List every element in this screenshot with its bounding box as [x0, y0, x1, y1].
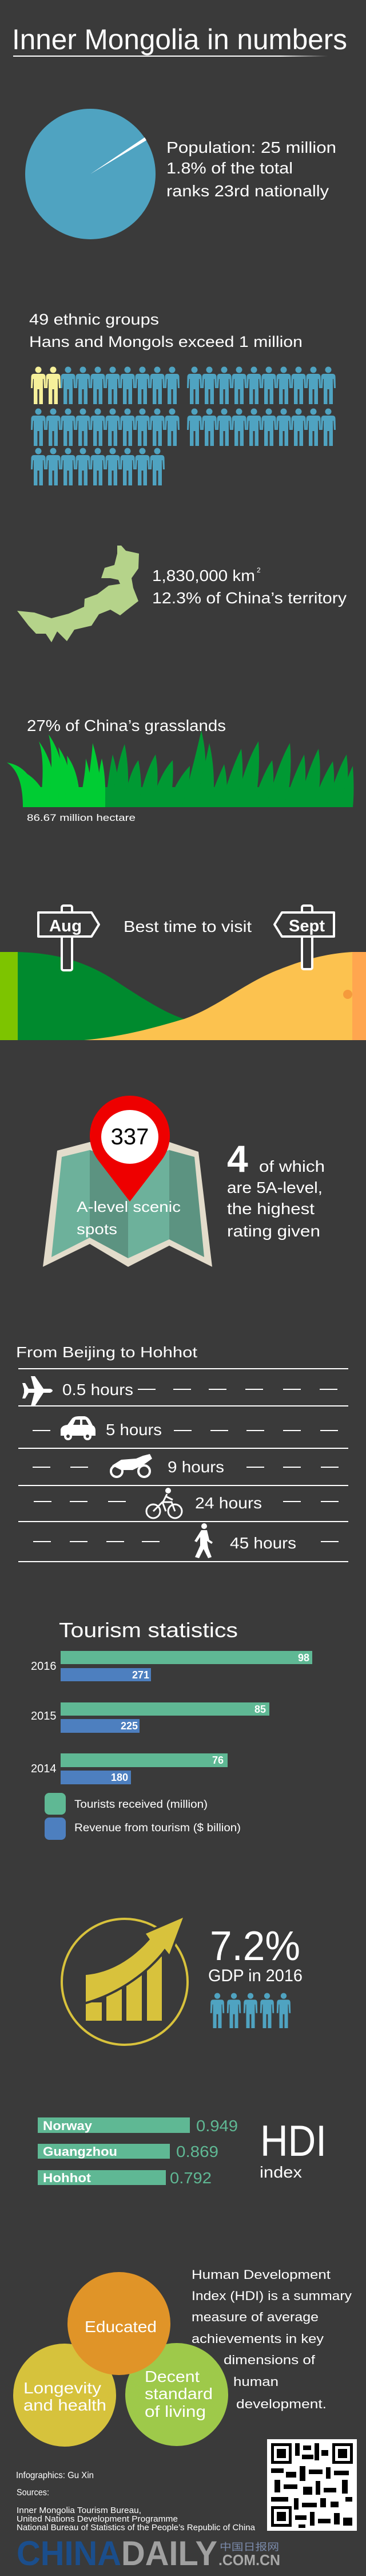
tourism bar chart: 2015 [31, 1710, 56, 1722]
GDP text: GDP in 2016 [208, 1966, 303, 1985]
area text: 1,830,000 km [152, 567, 255, 584]
title: Inner Mongolia in numbers [12, 23, 347, 56]
HDI definition text: human [233, 2374, 279, 2389]
credits and sources: Infographics: Gu Xin [16, 2471, 94, 2480]
credits and sources: National Bureau of Statistics of the People’s Republic of China [17, 2523, 256, 2532]
5A-level text: 4 [227, 1137, 248, 1180]
people icons: 49 ethnic groups [31, 366, 336, 485]
ethnic groups text: Hans and Mongols exceed 1 million [29, 333, 303, 350]
grasslands heading: 27% of China’s grasslands [27, 717, 226, 734]
HDI heading: HDI [260, 2117, 327, 2166]
credits and sources: Inner Mongolia Tourism Bureau, [17, 2506, 141, 2515]
folded map icon with pin: 337 [111, 1124, 149, 1149]
map of Inner Mongolia [17, 546, 139, 642]
legend [45, 1793, 241, 1840]
sign: Aug: Aug [49, 917, 82, 935]
HDI bar chart: Norway [43, 2119, 93, 2133]
tourism bar chart: 225 [121, 1720, 138, 1732]
credits and sources [16, 2471, 256, 2532]
HDI dimensions venn: Decent [145, 2368, 200, 2385]
folded map icon with pin: A-level scenic [77, 1198, 181, 1215]
population text: ranks 23rd nationally [166, 182, 329, 200]
sign: Sept [274, 906, 334, 969]
5A-level text: rating given [227, 1222, 320, 1240]
transport heading: From Beijing to Hohhot [16, 1344, 198, 1361]
HDI dimensions venn: Longevity [23, 2379, 101, 2397]
HDI heading [260, 2117, 327, 2181]
GDP text: 7.2% [210, 1923, 300, 1969]
HDI dimensions venn: standard [145, 2385, 213, 2403]
sign: Sept: Sept [289, 917, 325, 935]
transport road chart: 45 hours [230, 1534, 296, 1552]
grass illustration [7, 730, 353, 807]
folded map icon with pin: spots [77, 1220, 117, 1238]
HDI definition text: Index (HDI) is a summary [192, 2289, 352, 2303]
legend: Revenue from tourism ($ billion) [74, 1822, 241, 1834]
HDI dimensions venn: Educated [85, 2318, 157, 2336]
population text [166, 139, 336, 200]
HDI definition text: development. [236, 2397, 327, 2411]
people icons: GDP [210, 1993, 291, 2028]
HDI definition text: achievements in key [192, 2332, 324, 2346]
HDI bar chart: Hohhot [43, 2171, 92, 2185]
5A-level text: the highest [227, 1200, 315, 1218]
sign: Aug [38, 906, 99, 970]
transport road chart [18, 1368, 348, 1562]
ethnic groups text: 49 ethnic groups [29, 311, 159, 328]
logo: China Daily: .COM.CN [218, 2551, 280, 2569]
HDI dimensions venn: of living [145, 2403, 206, 2420]
tourism bar chart: 98 [298, 1652, 309, 1664]
HDI bar chart: 0.869 [176, 2143, 218, 2160]
hills: seasons [0, 952, 366, 1040]
tourism bar chart: 2016 [31, 1660, 56, 1673]
QR code [267, 2439, 357, 2531]
icon: car [61, 1416, 96, 1440]
area text [152, 566, 347, 607]
HDI definition text [192, 2267, 352, 2411]
tourism bar chart: 271 [132, 1669, 149, 1681]
area text: 2 [257, 566, 261, 574]
tourism bar chart: 2014 [31, 1763, 56, 1775]
icon: GDP growth chart [62, 1918, 188, 2045]
HDI bar chart: Guangzhou [43, 2144, 117, 2159]
logo: China Daily: CHINA [17, 2534, 121, 2573]
HDI definition text: measure of average [192, 2310, 319, 2324]
HDI heading: index [260, 2163, 302, 2181]
5A-level text: are 5A-level, [227, 1179, 323, 1196]
transport road chart: 24 hours [195, 1494, 262, 1512]
HDI dimensions venn [13, 2272, 228, 2447]
folded map icon with pin [43, 1096, 212, 1267]
logo: China Daily: DAILY [121, 2534, 217, 2573]
ethnic groups text [29, 311, 303, 350]
5A-level text: of which [259, 1157, 325, 1175]
icon: motorbike [111, 1454, 152, 1477]
population text: Population: 25 million [166, 139, 336, 156]
icon: plane [22, 1376, 53, 1406]
credits and sources: Sources: [17, 2488, 49, 2498]
transport road chart: 5 hours [106, 1421, 162, 1439]
best time text: Best time to visit [124, 918, 252, 935]
icon: walker [194, 1523, 213, 1558]
tourism bar chart: 180 [111, 1772, 128, 1783]
HDI bar chart: 0.792 [170, 2169, 212, 2187]
population text: 1.8% of the total [166, 159, 293, 177]
HDI definition text: dimensions of [224, 2353, 316, 2367]
hectare caption: 86.67 million hectare [27, 812, 136, 823]
pie chart: population [25, 109, 156, 239]
tourism bar chart [31, 1651, 312, 1784]
5A-level text [227, 1137, 325, 1240]
tourism bar chart: 85 [254, 1704, 266, 1715]
HDI dimensions venn: and health [23, 2396, 106, 2414]
icon: bicycle [146, 1488, 182, 1518]
logo: China Daily: 中国日报网 [220, 2542, 279, 2553]
HDI definition text: Human Development [192, 2267, 331, 2282]
logo: China Daily [17, 2534, 280, 2573]
area text: 12.3% of China’s territory [152, 589, 347, 607]
transport road chart: 0.5 hours [62, 1381, 133, 1398]
credits and sources: United Nations Development Programme [17, 2514, 178, 2524]
HDI bar chart: 0.949 [196, 2117, 238, 2135]
transport road chart: 9 hours [168, 1458, 224, 1476]
legend: Tourists received (million) [74, 1799, 208, 1811]
tourism bar chart: 76 [212, 1755, 224, 1766]
tourism heading: Tourism statistics [59, 1618, 238, 1642]
HDI bar chart [38, 2117, 238, 2187]
